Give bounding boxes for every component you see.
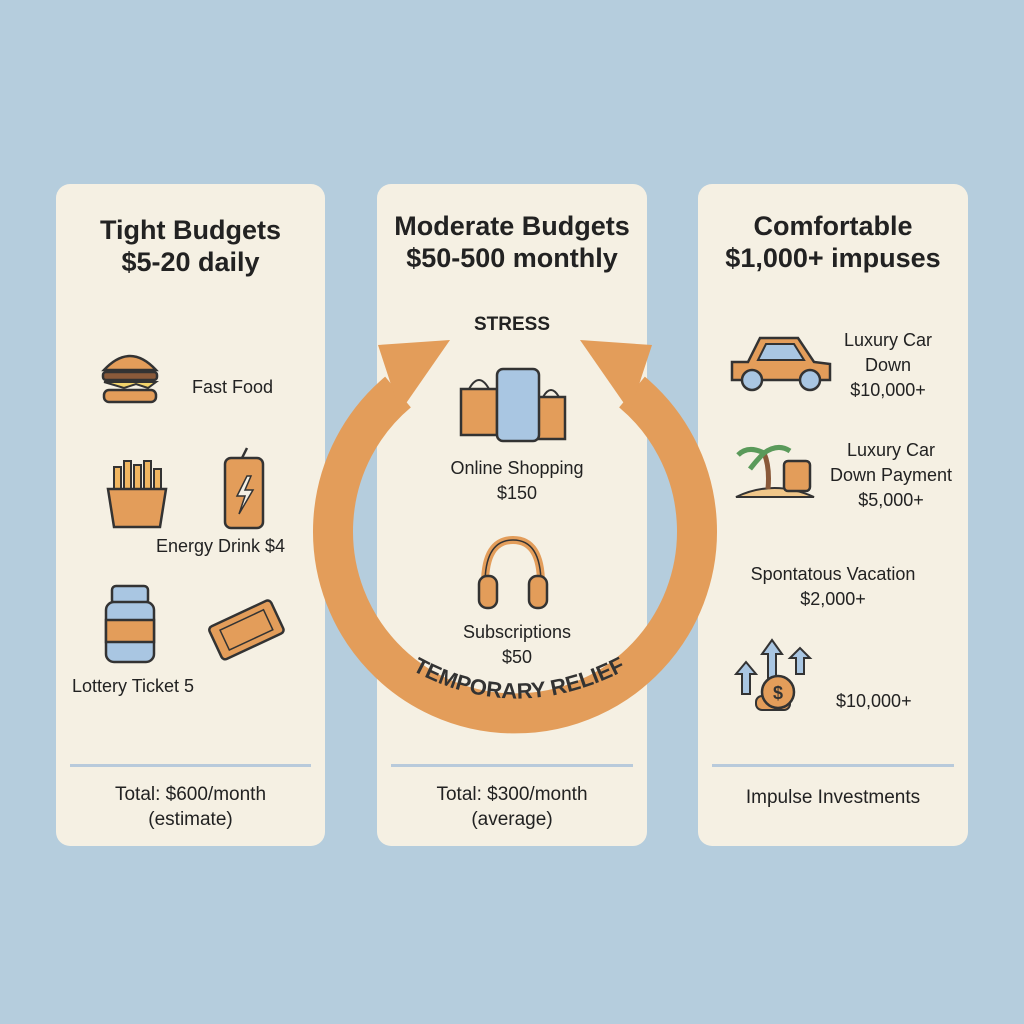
label: luxury car down: Luxury Car bbox=[844, 330, 932, 350]
label: spontaneous vacation: $2,000+ bbox=[800, 589, 866, 609]
heading: tight budgets bbox=[100, 215, 281, 277]
icon: car bbox=[730, 336, 832, 392]
label: stress: STRESS bbox=[474, 314, 550, 335]
label: luxury car down bbox=[844, 330, 932, 400]
label: subscriptions: $50 bbox=[502, 647, 532, 667]
icon: palm island bbox=[736, 444, 814, 498]
text: total moderate: Total: $300/month bbox=[436, 784, 588, 805]
heading: comfortable bbox=[725, 211, 941, 273]
text: total tight: Total: $600/month bbox=[115, 784, 266, 805]
text: total tight: (estimate) bbox=[148, 809, 233, 830]
label: luxury car down payment: $5,000+ bbox=[858, 490, 924, 510]
icon: coins arrows bbox=[734, 638, 812, 711]
label: luxury car down: $10,000+ bbox=[850, 380, 926, 400]
icon: shopping phone bbox=[460, 368, 566, 442]
text: impulse investments: Impulse Investments bbox=[746, 787, 920, 808]
text: total moderate bbox=[436, 784, 588, 830]
heading: comfortable: $1,000+ impuses bbox=[725, 243, 941, 273]
heading: moderate budgets: $50-500 monthly bbox=[406, 243, 618, 273]
label: online shopping: $150 bbox=[497, 483, 537, 503]
icon: lottery machine bbox=[104, 584, 156, 664]
label: online shopping bbox=[450, 458, 584, 503]
text: total tight bbox=[115, 784, 266, 830]
icon: energy drink can bbox=[224, 448, 264, 530]
icon: burger bbox=[101, 354, 159, 404]
panel: moderate budgets bbox=[377, 184, 647, 846]
icon: headphones bbox=[478, 536, 548, 610]
icon: fries bbox=[106, 460, 168, 528]
label: subscriptions bbox=[463, 622, 571, 667]
text: total moderate: (average) bbox=[471, 809, 553, 830]
label: lottery ticket: Lottery Ticket 5 bbox=[72, 676, 194, 696]
panel: tight budgets bbox=[56, 184, 325, 846]
label: energy drink: Energy Drink $4 bbox=[156, 536, 285, 556]
label: luxury car down payment: Luxury Car bbox=[847, 440, 935, 460]
heading: moderate budgets bbox=[394, 211, 630, 273]
icon: ticket bbox=[208, 599, 285, 660]
label: spontaneous vacation bbox=[751, 564, 915, 609]
label: luxury car down payment: Down Payment bbox=[830, 465, 952, 485]
label: luxury car down payment bbox=[830, 440, 952, 510]
label: fast food: Fast Food bbox=[192, 377, 273, 397]
heading: comfortable: Comfortable bbox=[753, 211, 912, 241]
label: spontaneous vacation: Spontatous Vacation bbox=[751, 564, 915, 584]
label: investment amount: $10,000+ bbox=[836, 691, 912, 711]
panel: comfortable bbox=[698, 184, 968, 846]
label: online shopping: Online Shopping bbox=[450, 458, 584, 478]
heading: tight budgets: Tight Budgets bbox=[100, 215, 281, 245]
arrow: temporary relief cycle: TEMPORARY RELIEF bbox=[416, 656, 622, 699]
label: subscriptions: Subscriptions bbox=[463, 622, 571, 642]
icon: coins arrows: $ bbox=[773, 683, 783, 703]
label: luxury car down: Down bbox=[865, 355, 911, 375]
heading: moderate budgets: Moderate Budgets bbox=[394, 211, 630, 241]
heading: tight budgets: $5-20 daily bbox=[121, 247, 260, 277]
